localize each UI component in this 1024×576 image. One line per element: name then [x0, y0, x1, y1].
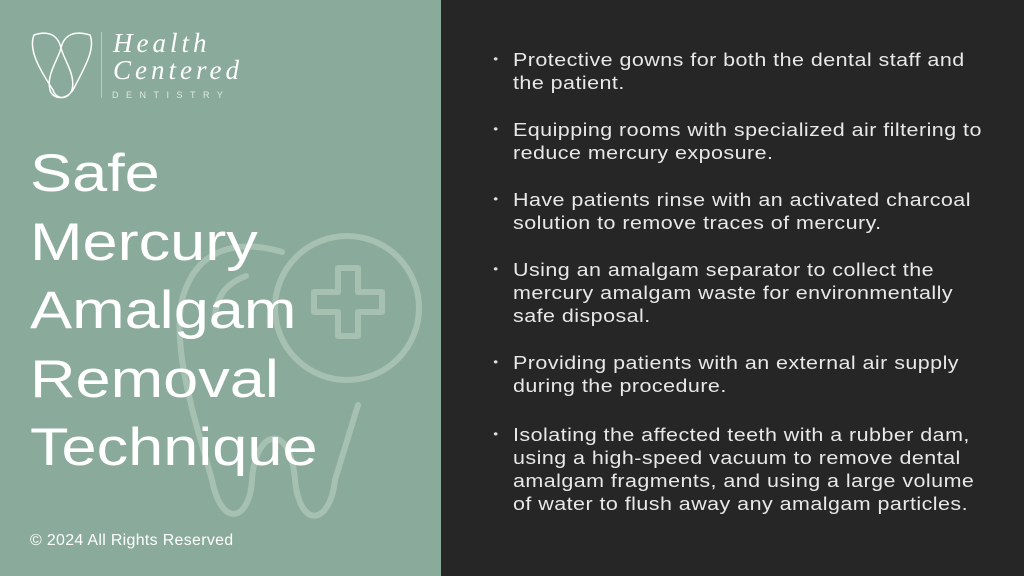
bullet 4: safe disposal.	[513, 305, 651, 326]
bullet 3	[513, 188, 971, 234]
title: Mercury	[30, 212, 258, 272]
bullet 6	[513, 423, 974, 515]
bullet 2	[513, 118, 982, 164]
icon: tooth with plus	[176, 233, 422, 518]
title: Technique	[30, 418, 318, 477]
bullet 6: of water to flush away any amalgam particles.	[513, 493, 968, 514]
logo: Health	[113, 28, 210, 58]
bullet 2: reduce mercury exposure.	[513, 142, 773, 163]
bullet 3: solution to remove traces of mercury.	[513, 212, 882, 233]
bullet 5	[513, 351, 959, 397]
logo: Centered	[113, 55, 243, 85]
logo	[32, 28, 243, 100]
title: Safe	[30, 144, 160, 203]
bullet 4: mercury amalgam waste for environmentally	[513, 282, 953, 303]
bullet 2: Equipping rooms with specialized air filtering to	[513, 119, 982, 140]
title	[30, 144, 318, 477]
bullet 1	[513, 48, 965, 94]
bullet 4	[513, 258, 953, 327]
title: Amalgam	[30, 281, 296, 340]
bullet 4: Using an amalgam separator to collect the	[513, 259, 934, 280]
bullet 5: Providing patients with an external air supply	[513, 352, 959, 373]
panel: right bullets	[441, 0, 1024, 576]
logo: DENTISTRY	[112, 90, 230, 100]
bullet 1: Protective gowns for both the dental staff and	[513, 49, 965, 70]
bullet 3: Have patients rinse with an activated charcoal	[513, 189, 971, 210]
title: Removal	[30, 350, 279, 408]
panel: left green	[0, 0, 441, 576]
bullet 1: the patient.	[513, 72, 625, 93]
bullet 6: amalgam fragments, and using a large volume	[513, 470, 974, 491]
bullet 6: Isolating the affected teeth with a rubber dam,	[513, 424, 970, 445]
bullet 6: using a high-speed vacuum to remove dental	[513, 447, 961, 468]
bullet 5: during the procedure.	[513, 375, 727, 396]
copyright: © 2024 All Rights Reserved	[30, 532, 234, 549]
